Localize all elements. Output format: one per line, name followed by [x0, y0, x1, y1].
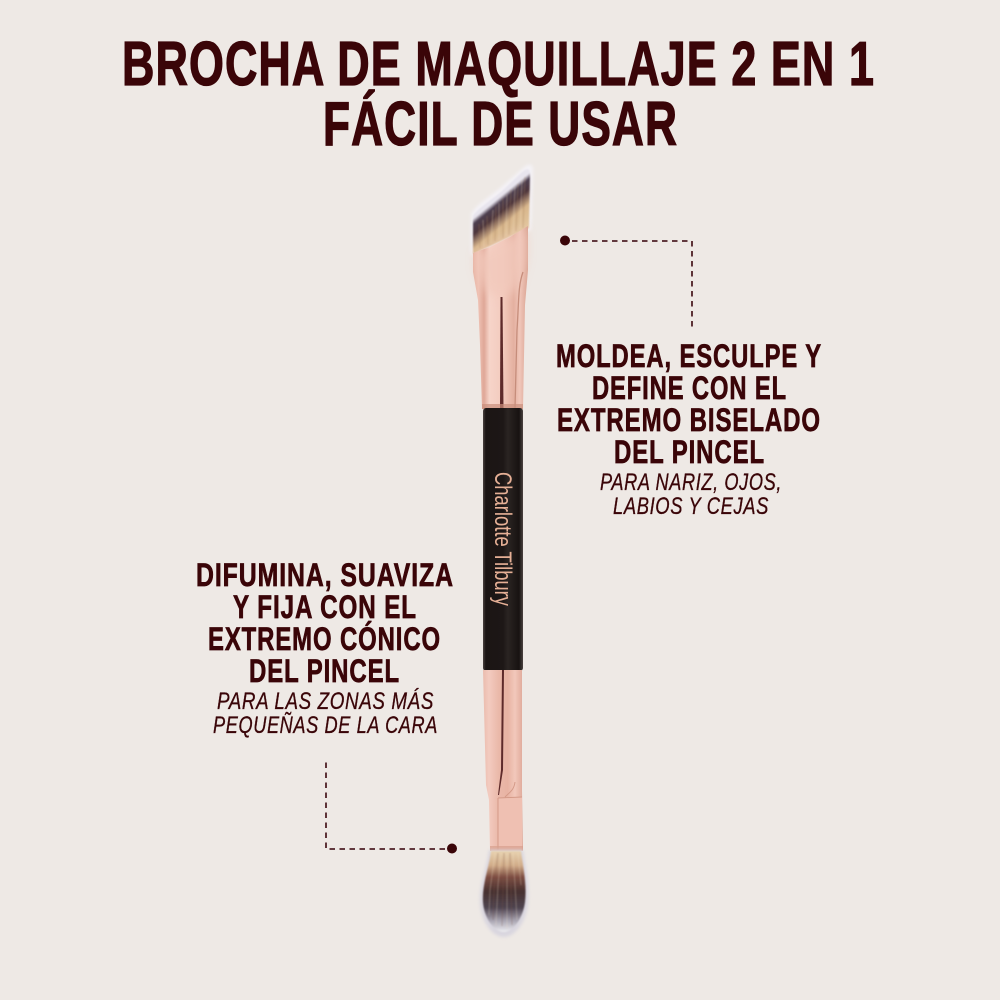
heading: angled end: MOLDEA, ESCULPE Y [556, 338, 822, 374]
heading: tapered end [196, 557, 454, 689]
makeup brush illustration [471, 165, 533, 937]
round bristles [480, 850, 528, 937]
connector: tapered end [326, 759, 457, 854]
callout: tapered end [196, 557, 457, 854]
subtext: angled end: PARA NARIZ, OJOS, [600, 469, 782, 496]
heading: angled end: DEFINE CON EL [592, 370, 787, 406]
subtext: tapered end: PEQUEÑAS DE LA CARA [213, 712, 438, 739]
heading: tapered end: DIFUMINA, SUAVIZA [196, 557, 454, 593]
subtext: angled end: LABIOS Y CEJAS [613, 493, 769, 520]
heading: tapered end: Y FIJA CON EL [233, 589, 417, 625]
upper ferrule [473, 226, 528, 409]
subtext: angled end [600, 469, 782, 520]
heading: tapered end: DEL PINCEL [249, 653, 400, 689]
subtext: tapered end [213, 688, 438, 739]
heading: angled end: EXTREMO BISELADO [557, 402, 821, 438]
callout: angled end [556, 236, 822, 520]
heading: angled end: DEL PINCEL [614, 434, 765, 470]
title [122, 30, 875, 159]
heading: tapered end: EXTREMO CÓNICO [208, 621, 441, 657]
black handle [483, 408, 523, 671]
handle brand name: Charlotte Tilbury [489, 472, 516, 606]
angled bristles [471, 165, 533, 256]
heading: angled end [556, 338, 822, 470]
subtext: tapered end: PARA LAS ZONAS MÁS [217, 688, 434, 715]
lower ferrule [483, 670, 523, 851]
title: FÁCIL DE USAR [323, 90, 678, 159]
connector: angled end [560, 236, 692, 331]
